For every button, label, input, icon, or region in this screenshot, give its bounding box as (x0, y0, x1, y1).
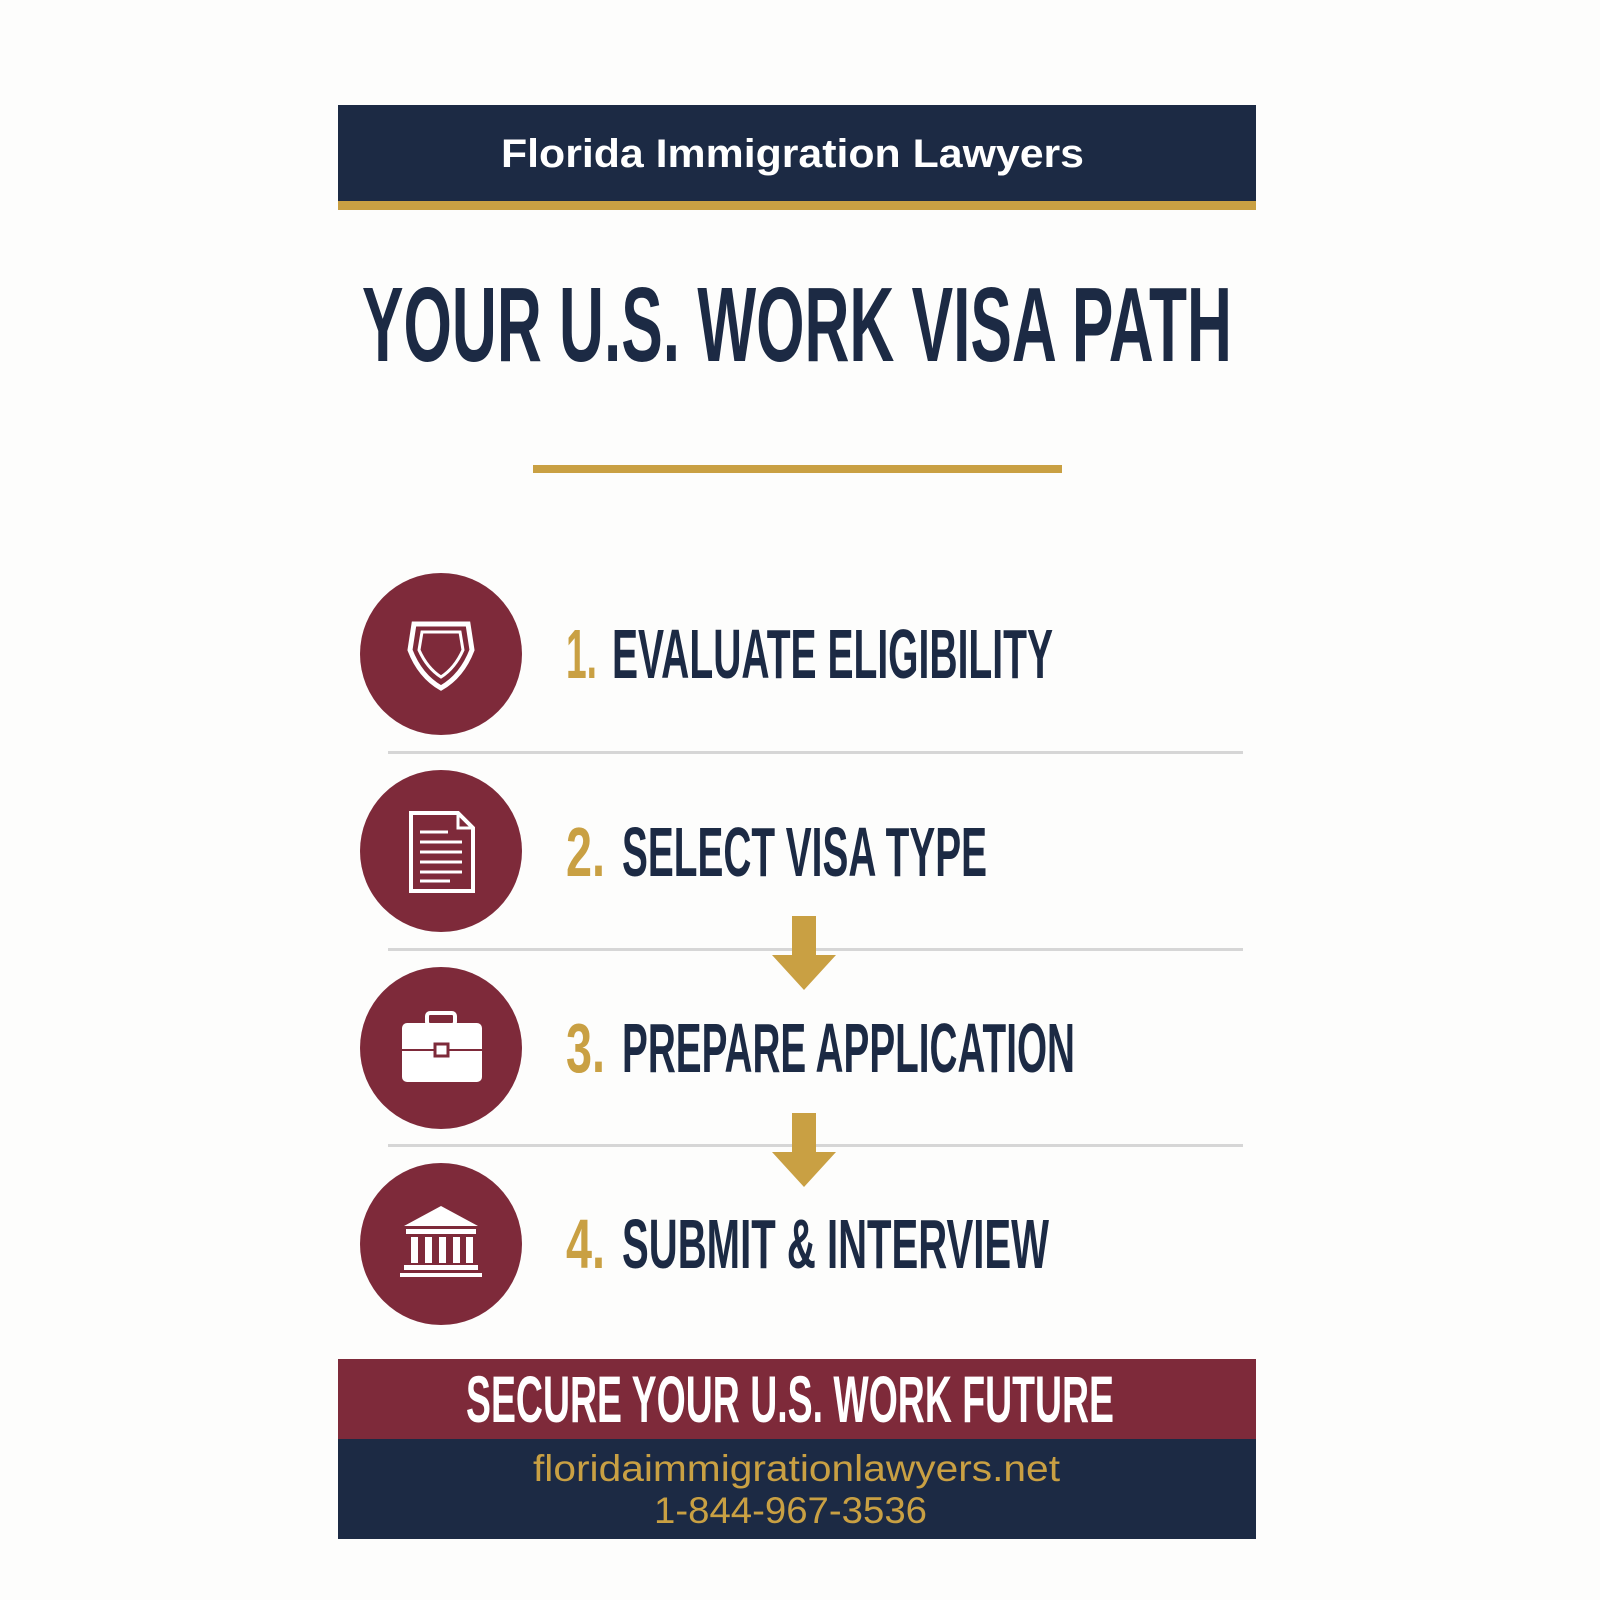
icon: shield (360, 573, 522, 735)
footer banner (338, 1359, 1256, 1439)
step 2 (360, 770, 987, 932)
step 3: PREPARE APPLICATION (622, 1009, 1075, 1087)
contact panel (338, 1439, 1256, 1539)
step 4 (360, 1163, 1049, 1325)
title underline (533, 465, 1062, 473)
icon: document (360, 770, 522, 932)
header bar (338, 105, 1256, 210)
arrow 2 (772, 1113, 836, 1187)
arrow 1 (772, 916, 836, 990)
icon: briefcase (360, 967, 522, 1129)
footer banner: SECURE YOUR U.S. WORK FUTURE (466, 1362, 1114, 1436)
step 2: 2. (566, 813, 605, 891)
step 1: 1. (566, 615, 597, 693)
step 1: EVALUATE ELIGIBILITY (612, 615, 1053, 693)
step 1 (360, 573, 1053, 735)
step 3: 3. (566, 1009, 605, 1087)
contact panel: 1-844-967-3536 (654, 1490, 927, 1531)
header bar: Florida Immigration Lawyers (501, 132, 1084, 176)
step 2: SELECT VISA TYPE (622, 813, 987, 891)
step 3 (360, 967, 1075, 1129)
step 4: 4. (566, 1205, 605, 1283)
contact panel: floridaimmigrationlawyers.net (533, 1448, 1061, 1489)
icon: courthouse (360, 1163, 522, 1325)
step 4: SUBMIT & INTERVIEW (622, 1205, 1049, 1283)
